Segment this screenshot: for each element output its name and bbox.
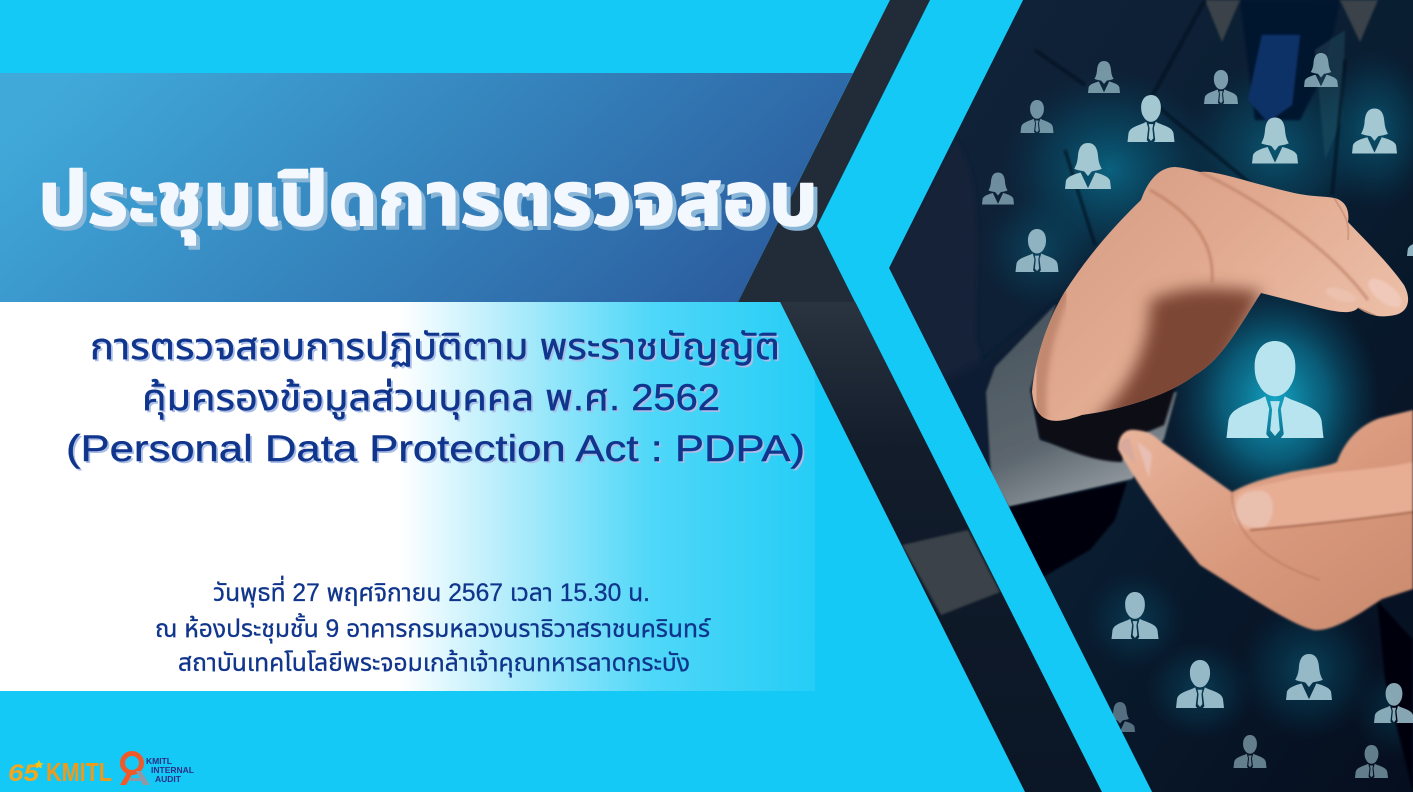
lower hand (1118, 410, 1413, 630)
subtitle line 1: การตรวจสอบการปฏิบัติตาม พระราชบัญญัติ (92, 328, 782, 369)
audit pin mark (120, 754, 150, 785)
finger creases (1150, 190, 1212, 283)
sleeve under the hand (944, 360, 1010, 508)
event details (155, 575, 711, 678)
logo: KMITL Internal Audit (120, 754, 194, 785)
logo: 65 KMITL: 65 (8, 760, 40, 787)
wrist shadow (1039, 290, 1064, 420)
subtitle: act name (66, 326, 807, 471)
subtitle line 3: (Personal Data Protection Act : PDPA) (68, 430, 807, 471)
cyan chevron band (817, 0, 1152, 792)
subtitle line 2: คุ้มครองข้อมูลส่วนบุคคล พ.ศ. 2562 (144, 379, 722, 422)
gradient white panel (0, 302, 815, 691)
shirt cuff (986, 304, 1177, 507)
sleeve cuff detail (902, 530, 1000, 615)
cuff interior (1032, 385, 1176, 462)
palm shadow (1090, 288, 1262, 425)
subtitle line 2: คุ้มครองข้อมูลส่วนบุคคล พ.ศ. 2562 (142, 377, 720, 420)
subtitle line 1: การตรวจสอบการปฏิบัติตาม พระราชบัญญัติ (90, 326, 780, 367)
logo: KMITL Internal Audit: KMITL (146, 756, 172, 766)
logo: 65 KMITL (8, 757, 112, 787)
persons bottom (1112, 592, 1413, 778)
event details: สถาบันเทคโนโลยีพระจอมเกล้าเจ้าคุณทหารลาดกระบัง (178, 649, 690, 678)
subtitle line 3: (Personal Data Protection Act : PDPA) (66, 428, 805, 469)
blue title banner (0, 73, 853, 302)
black shirt area (1009, 482, 1127, 577)
lapel lines (1035, 0, 1345, 245)
logo: KMITL Internal Audit: INTERNAL (151, 765, 194, 775)
persons top (982, 53, 1413, 272)
event details: วันพุธที่ 27 พฤศจิกายน 2567 เวลา 15.30 น. (213, 575, 650, 608)
teal glows (980, 50, 1413, 760)
logo: KMITL Internal Audit: AUDIT (155, 774, 182, 784)
jacket background (880, 0, 1413, 792)
event details: ณ ห้องประชุมชั้น 9 อาคารกรมหลวงนราธิวาสราชนครินทร์ (155, 612, 711, 644)
title: ประชุมเปิดการตรวจสอบ (42, 161, 822, 249)
nails (1368, 278, 1402, 308)
left sleeve (889, 147, 980, 386)
photo strip: sleeve between panel and chevron (780, 302, 1110, 792)
logo: 65 KMITL: KMITL (46, 757, 112, 787)
central person (1226, 341, 1324, 438)
photo: suit with protective hands (880, 0, 1413, 792)
dark chevron strip (738, 0, 930, 302)
title: ประชุมเปิดการตรวจสอบ (38, 157, 818, 245)
upper hand (1020, 160, 1413, 430)
shirt and tie (1205, 0, 1378, 160)
